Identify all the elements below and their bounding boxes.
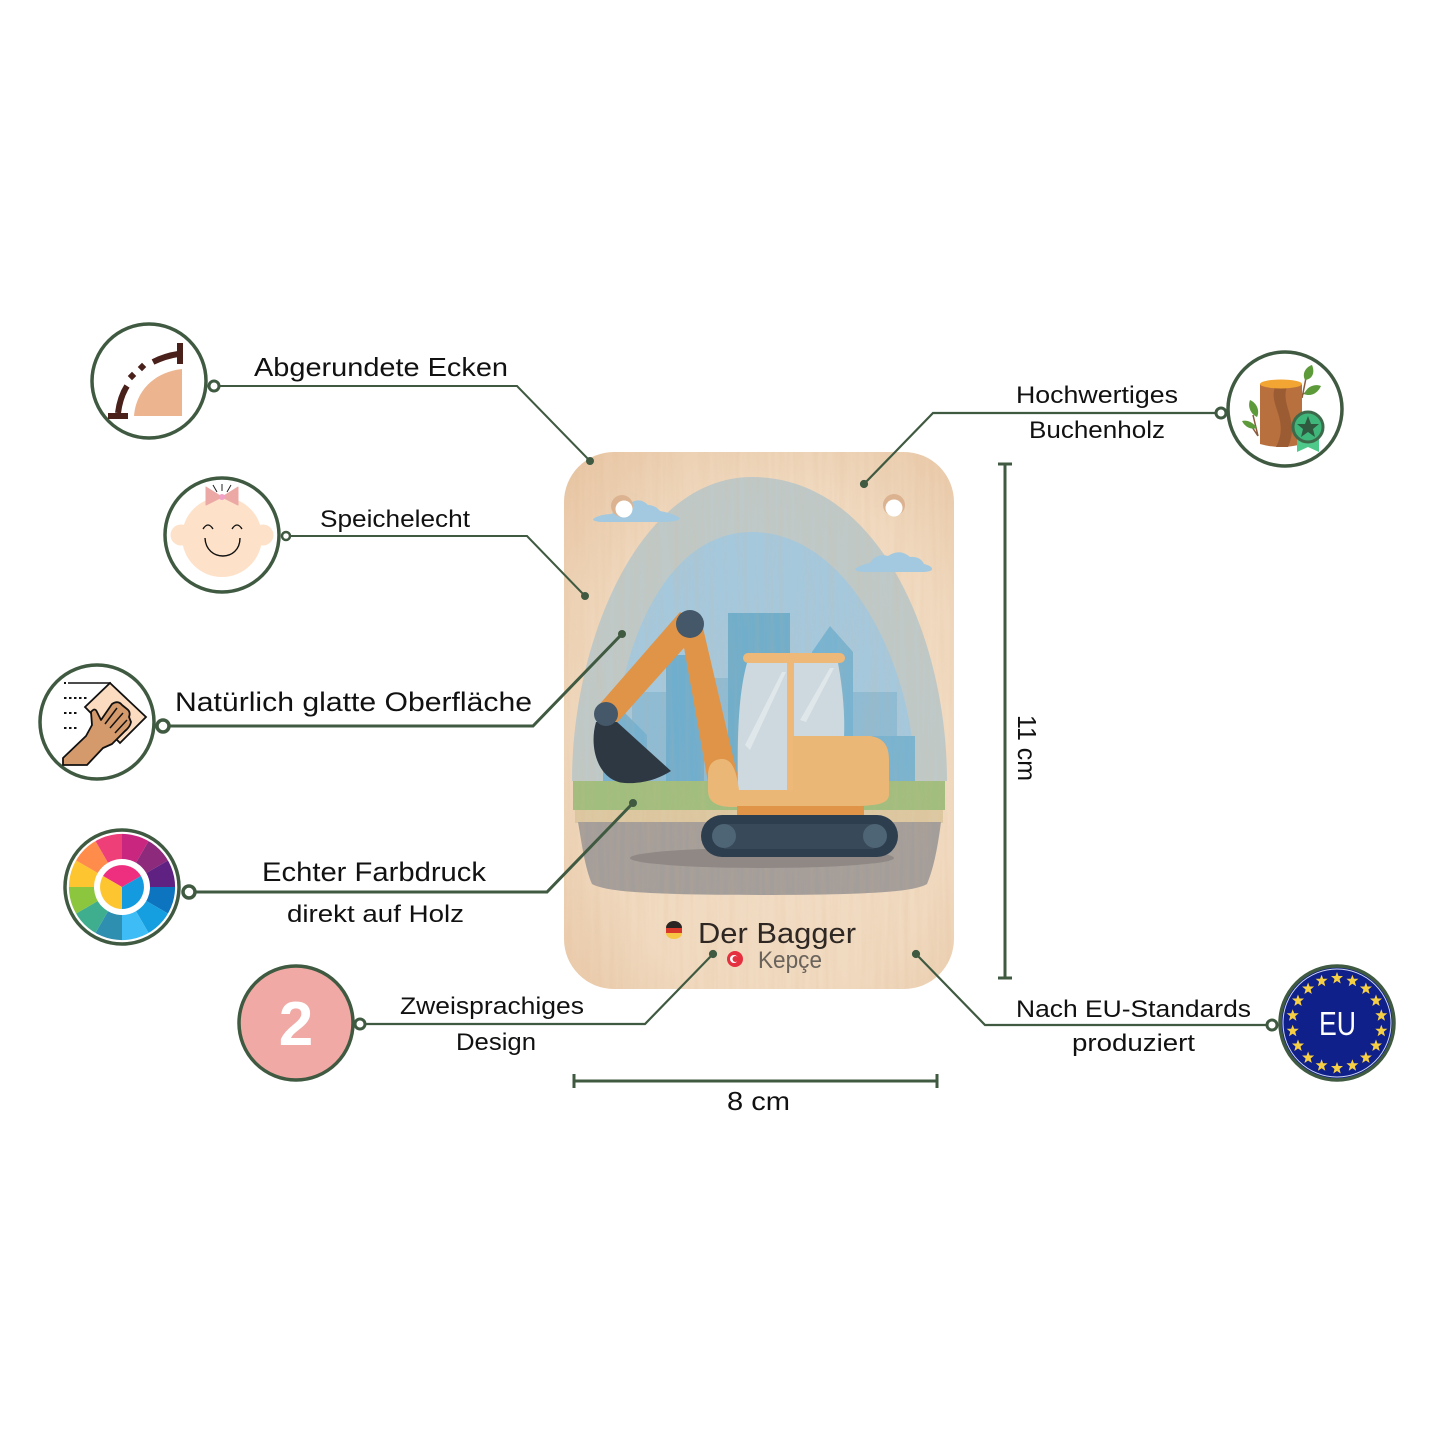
label: EU standards line 2: produziert: [1072, 1030, 1195, 1057]
dimension: width label: 8 cm: [727, 1086, 790, 1116]
icon: wood log with badge: [1228, 352, 1342, 466]
panel: wooden card: [564, 452, 954, 989]
icon: hand wiping surface: [40, 665, 154, 779]
label: colour print: Echter Farbdruck: [262, 857, 487, 887]
card subtitle: Kepçe: [758, 947, 822, 974]
icon: EU flag: [1280, 966, 1394, 1080]
flag: Turkey: [727, 951, 743, 967]
dimension: width bar: [574, 1074, 937, 1088]
callout line: smooth surface: [157, 630, 626, 732]
inner sky: [624, 532, 912, 736]
dimension: height label: 11 cm: [1012, 715, 1042, 781]
label: bilingual line 1: Zweisprachiges: [400, 993, 584, 1020]
label: rounded corners: Abgerundete Ecken: [254, 352, 508, 382]
callout line: colour print: [183, 799, 637, 898]
label: EU standards line 1: Nach EU-Standards: [1016, 996, 1251, 1023]
label: bilingual line 2: Design: [456, 1029, 536, 1056]
wood grain texture: [582, 478, 906, 948]
card title: Der Bagger: [698, 918, 856, 950]
label: smooth surface: Natürlich glatte Oberfläche: [175, 687, 532, 717]
icon: colour wheel: [63, 828, 181, 946]
outer egg background: [572, 477, 947, 781]
ground: [573, 781, 945, 895]
callout line: beech wood: [861, 408, 1226, 487]
excavator: [594, 610, 898, 868]
holes: [611, 494, 905, 518]
icon: baby face: [165, 478, 279, 592]
label: beech wood line 1: Hochwertiges: [1016, 382, 1178, 409]
callout line: EU standards: [913, 951, 1277, 1030]
flag: Germany: [666, 921, 682, 939]
city skyline: [603, 613, 915, 781]
callout line: saliva resistant: [282, 532, 588, 599]
icon: number two: [239, 966, 353, 1080]
icon: rounded corner: [92, 324, 206, 438]
icon: number two: 2: [279, 990, 313, 1059]
callout line: bilingual: [355, 951, 716, 1029]
label: beech wood line 2: Buchenholz: [1029, 417, 1165, 444]
icon: EU flag: EU: [1319, 1005, 1356, 1042]
dimension: height bar: [998, 464, 1012, 978]
label: saliva resistant: Speichelecht: [320, 506, 470, 533]
label: direct on wood: direkt auf Holz: [287, 901, 464, 928]
clouds: [593, 500, 932, 572]
callout line: rounded corners: [209, 381, 593, 464]
